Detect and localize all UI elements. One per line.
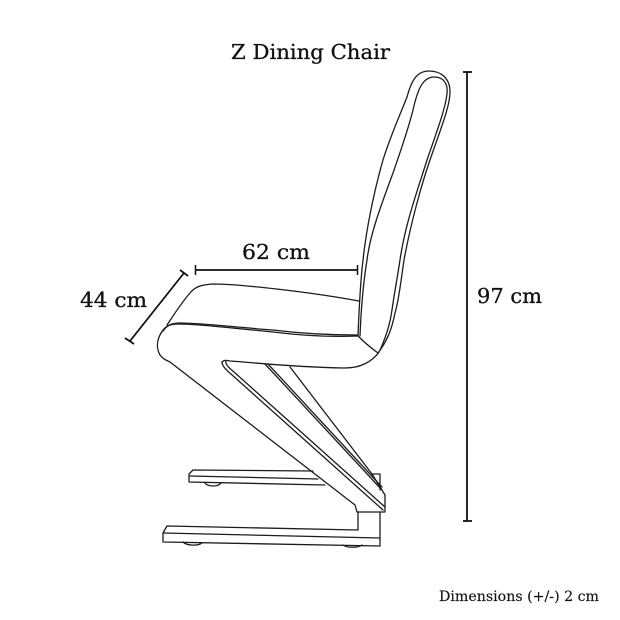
under seat curve: [222, 352, 379, 368]
dimension: seat width 62 cm: 62 cm: [242, 240, 310, 264]
upper base bar: [189, 470, 325, 485]
footnote: Dimensions (+/-) 2 cm: [439, 589, 599, 605]
lower seat and front leg of the Z: [157, 333, 385, 512]
dimension: height 97 cm: 97 cm: [477, 284, 542, 308]
backrest inner seam: [360, 77, 447, 350]
lower base bar: [163, 512, 380, 546]
dimension: seat depth 44 cm: 44 cm: [80, 288, 147, 312]
lower rear seam: [358, 336, 378, 353]
chair line drawing: [157, 71, 450, 547]
seat piping: [161, 324, 358, 336]
seat cushion top: [167, 284, 359, 325]
title: Z Dining Chair: [231, 40, 390, 64]
backrest outer outline: [358, 71, 450, 353]
base feet: [205, 483, 221, 486]
dimension: seat depth 44 cm: [80, 270, 188, 344]
inner Z strips: [222, 362, 383, 510]
